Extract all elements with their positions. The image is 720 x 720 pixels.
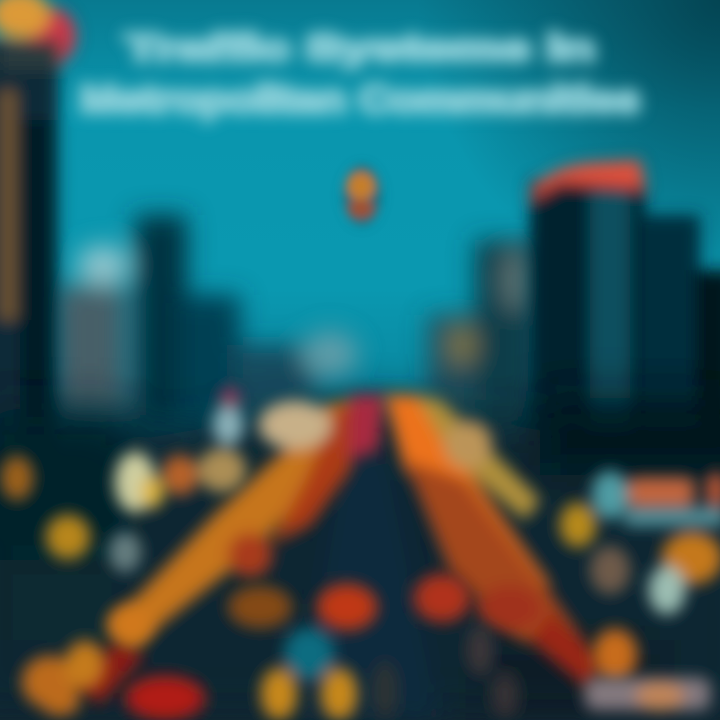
balloon bbox=[343, 165, 381, 225]
left-side lights bbox=[1, 387, 246, 572]
lower-left lights bbox=[22, 605, 152, 716]
right foreground tower bbox=[530, 160, 720, 500]
left road light streak bbox=[70, 395, 385, 705]
title: Traffic Systems in bbox=[125, 27, 595, 68]
title bbox=[80, 27, 640, 121]
lower-right vehicles bbox=[371, 624, 710, 720]
road centre bbox=[300, 450, 440, 720]
vehicles and lights on the road bbox=[125, 574, 637, 720]
right road light streak bbox=[385, 395, 600, 690]
street base bbox=[0, 400, 720, 720]
distant buildings left bbox=[55, 215, 358, 425]
title: Metropolitan Communities bbox=[80, 79, 640, 121]
distant buildings right bbox=[428, 240, 537, 440]
left foreground tower bbox=[0, 0, 76, 540]
right-side lights bbox=[560, 471, 720, 614]
